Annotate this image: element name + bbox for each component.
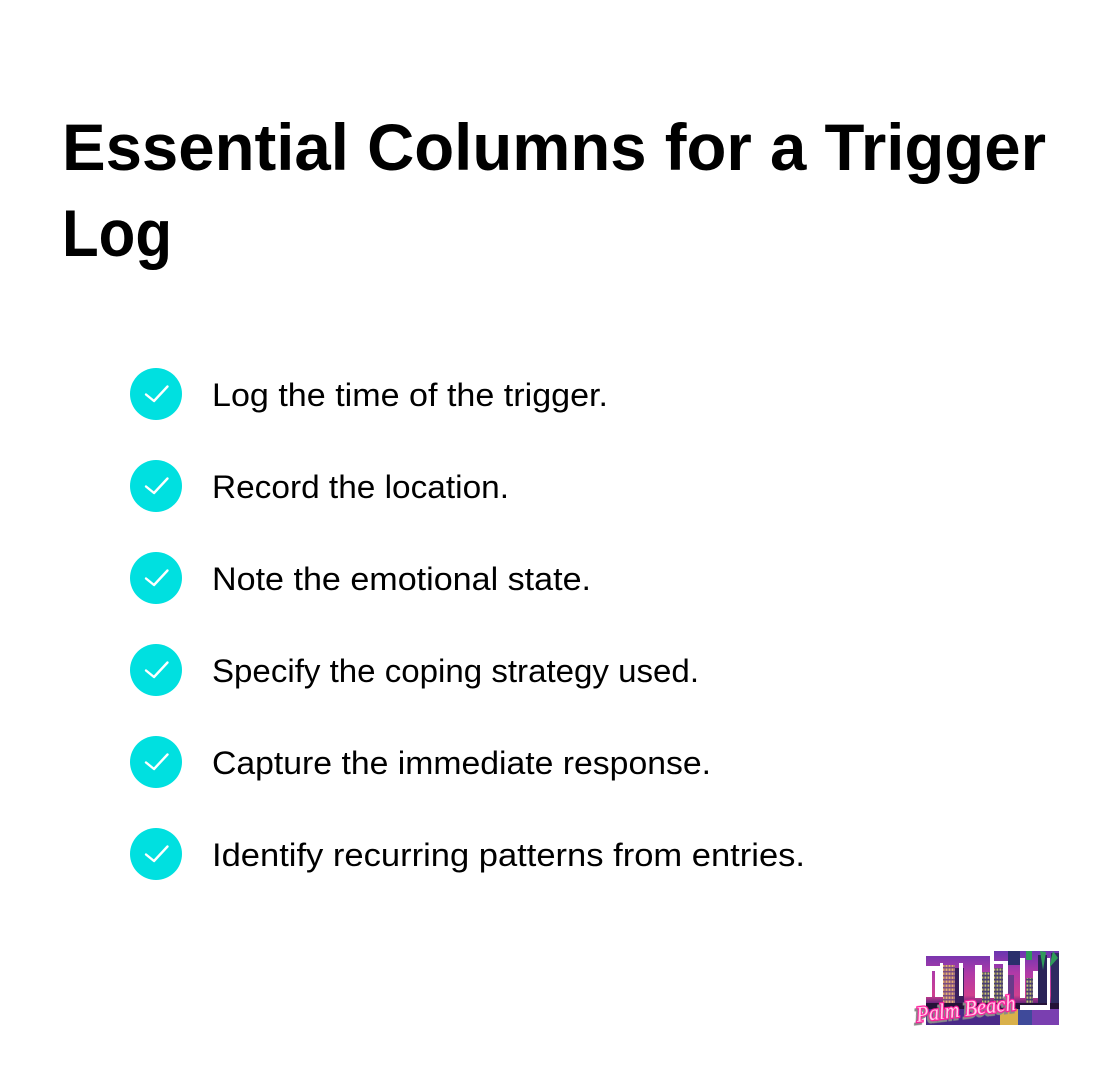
item 1: log the time: Log the time of the trigger. bbox=[212, 377, 608, 413]
item 4: specify the coping strategy bbox=[130, 644, 699, 696]
item 5: capture the immediate response: Capture the immediate response. bbox=[212, 745, 711, 781]
infographic canvas bbox=[66, 122, 1059, 1026]
title: Log bbox=[62, 196, 172, 270]
item 3: note the emotional state bbox=[130, 552, 591, 604]
title bbox=[62, 110, 1046, 270]
title: Essential Columns for a Trigger bbox=[62, 110, 1046, 184]
item 5: capture the immediate response bbox=[130, 736, 711, 788]
item 6: identify recurring patterns bbox=[130, 828, 805, 880]
item 3: note the emotional state: Note the emotional state. bbox=[212, 561, 591, 597]
logo script: Palm Beach bbox=[914, 990, 1017, 1027]
item 1: log the time bbox=[130, 368, 608, 420]
item 2: record the location: Record the location. bbox=[212, 469, 509, 505]
item 2: record the location bbox=[130, 460, 509, 512]
item 4: specify the coping strategy: Specify the coping strategy used. bbox=[212, 653, 699, 689]
item 6: identify recurring patterns: Identify recurring patterns from entries. bbox=[212, 837, 805, 873]
white letter gaps bbox=[926, 951, 1050, 1010]
checklist bbox=[130, 368, 805, 880]
logo: Amity Palm Beach bbox=[914, 951, 1059, 1027]
